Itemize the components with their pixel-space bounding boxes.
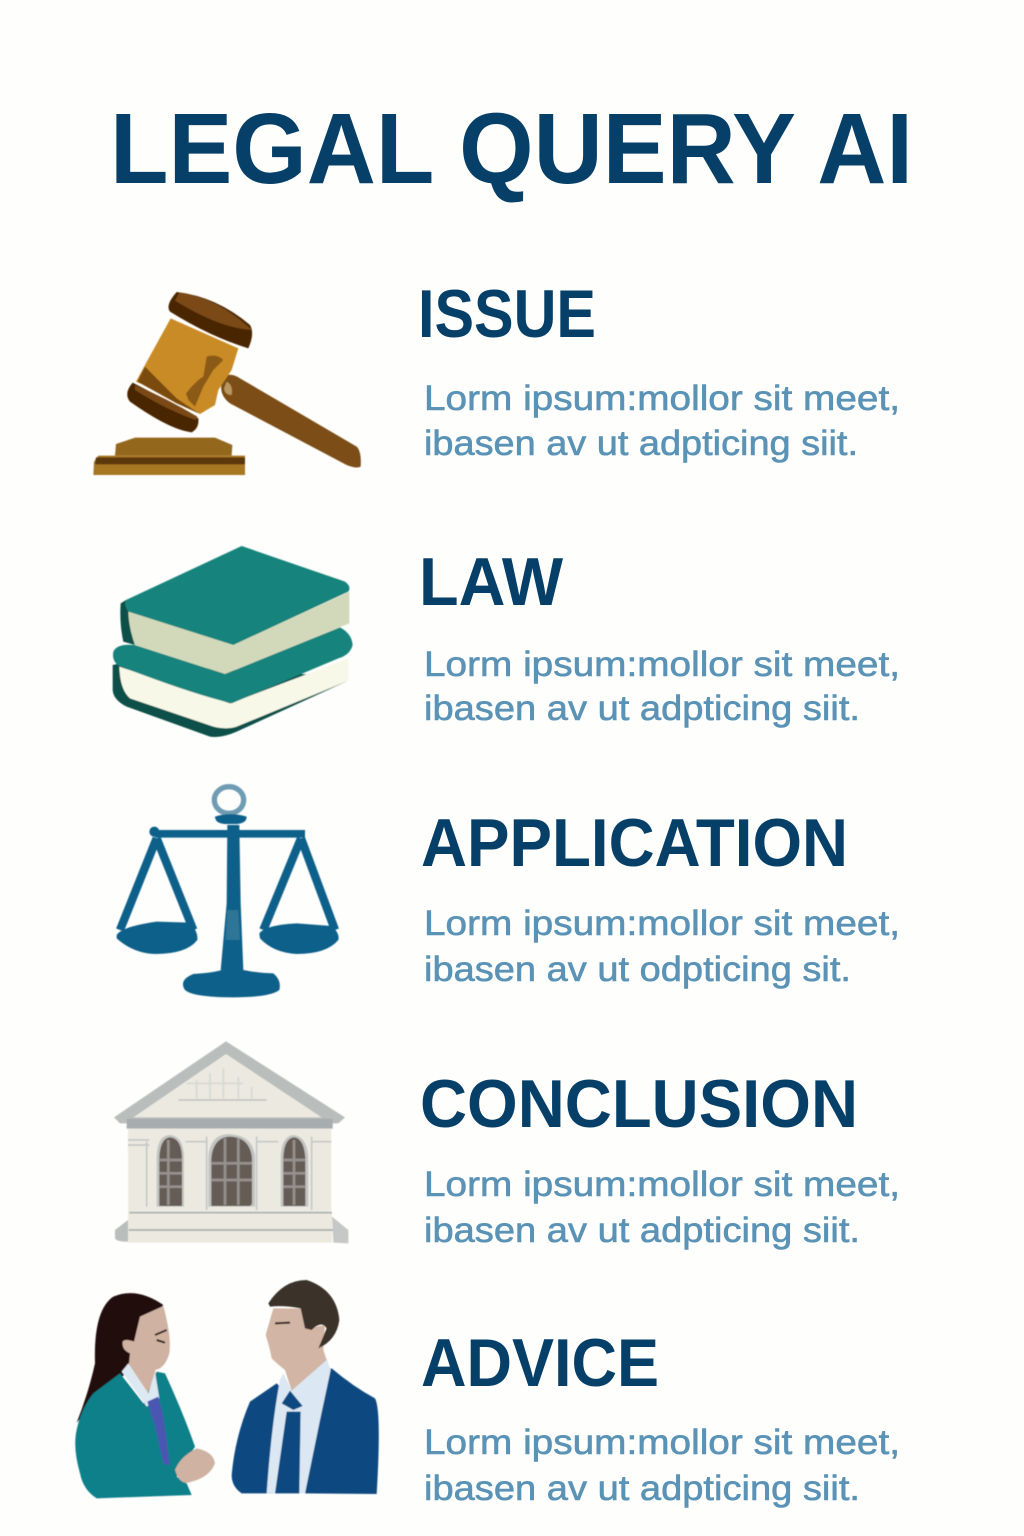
text: conclusion description: ibasen av ut adpticing siit.	[424, 1211, 860, 1250]
text: advice description: Lorm ipsum:mollor sit meet,	[424, 1423, 900, 1462]
text: advice description: ibasen av ut adpticing siit.	[424, 1469, 860, 1508]
text: issue description	[424, 379, 900, 463]
heading: advice: ADVICE	[421, 1325, 659, 1401]
icon: books	[113, 546, 353, 737]
row: application	[117, 787, 900, 997]
icon: courthouse	[114, 1041, 348, 1243]
man	[232, 1280, 379, 1494]
text: application description: ibasen av ut odpticing sit.	[424, 950, 851, 989]
text: application description	[424, 904, 900, 989]
heading: law: LAW	[419, 544, 564, 620]
text: law description: Lorm ipsum:mollor sit meet,	[424, 645, 900, 684]
text: application description: Lorm ipsum:mollor sit meet,	[424, 904, 900, 943]
text: advice description	[424, 1423, 900, 1508]
text: conclusion description	[424, 1165, 900, 1250]
text: law description	[424, 645, 900, 728]
heading: conclusion: CONCLUSION	[420, 1066, 858, 1142]
row: advice	[75, 1280, 900, 1508]
icon: gavel	[93, 292, 361, 475]
title: LEGAL QUERY AI	[110, 93, 913, 205]
icon: scales of justice	[117, 787, 339, 997]
icon: two people talking	[75, 1280, 379, 1498]
text: issue description: Lorm ipsum:mollor sit meet,	[424, 379, 900, 418]
row: conclusion	[114, 1041, 900, 1250]
heading: application: APPLICATION	[421, 805, 848, 881]
row: issue	[93, 276, 900, 475]
row: law	[113, 544, 900, 737]
heading: issue: ISSUE	[418, 276, 596, 352]
woman	[75, 1293, 215, 1498]
text: issue description: ibasen av ut adpticing siit.	[424, 424, 858, 463]
text: conclusion description: Lorm ipsum:mollor sit meet,	[424, 1165, 900, 1204]
text: law description: ibasen av ut adpticing siit.	[424, 689, 860, 728]
